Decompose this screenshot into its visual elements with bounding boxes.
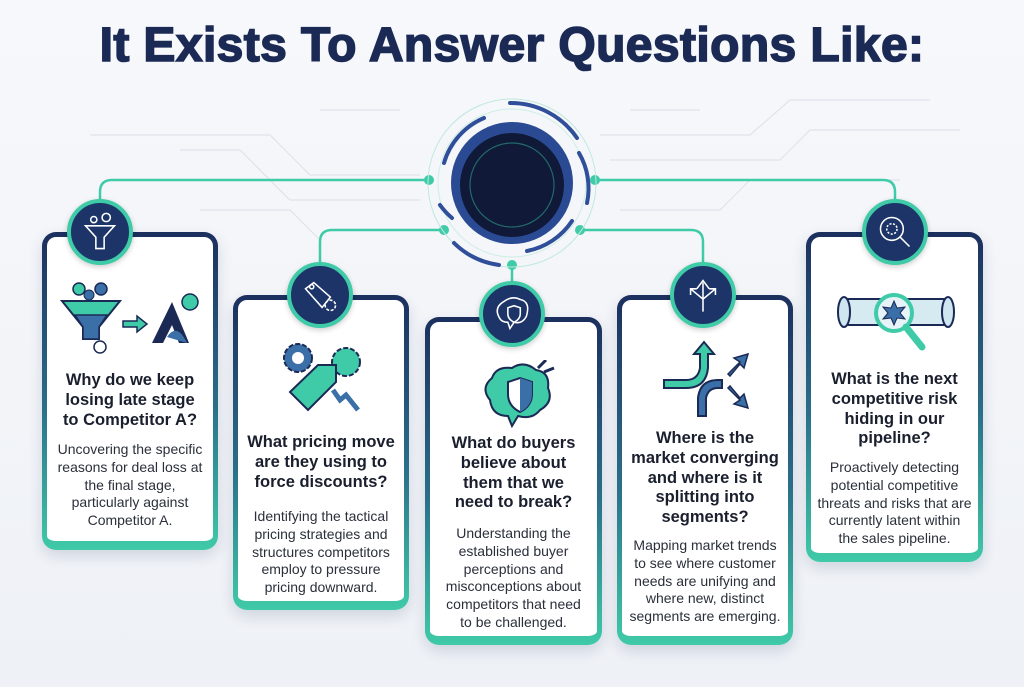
body 5	[817, 459, 972, 546]
question 5	[831, 370, 958, 447]
question 1: to Competitor A?	[63, 411, 197, 429]
icon circle 4	[670, 262, 736, 328]
body 3: Understanding the	[456, 525, 571, 541]
card 2	[233, 295, 409, 610]
body 3: perceptions and	[464, 561, 563, 577]
question 4	[631, 429, 779, 526]
card 4	[617, 295, 793, 645]
question 2: What pricing move	[247, 433, 395, 451]
question 2	[247, 433, 395, 491]
body 1: particularly against	[72, 494, 188, 510]
body 2: pricing strategies and	[254, 526, 388, 542]
question 1: Why do we keep	[66, 371, 194, 389]
question 4: Where is the	[656, 429, 754, 447]
question 4: splitting into	[656, 488, 754, 506]
icon circle 5	[862, 199, 928, 265]
question 5: competitive risk	[832, 390, 957, 408]
question 4: segments?	[661, 508, 749, 526]
body 5: currently latent within	[829, 512, 960, 528]
body 4	[630, 537, 780, 624]
body 4: where new, distinct	[646, 590, 764, 606]
question 4: market converging	[631, 449, 779, 467]
question 5: hiding in our	[845, 410, 944, 428]
body 3: to be challenged.	[460, 614, 567, 630]
question 5: pipeline?	[858, 429, 931, 447]
big icon: price tag	[283, 343, 361, 412]
body 3: competitors that need	[446, 596, 581, 612]
card 3	[425, 317, 602, 645]
body 5: Proactively detecting	[830, 459, 959, 475]
body 2: employ to pressure	[261, 561, 381, 577]
question 2: are they using to	[255, 453, 387, 471]
body 4: needs are unifying and	[634, 573, 776, 589]
body 4: to see where customer	[634, 555, 776, 571]
title: It Exists To Answer Questions Like:	[100, 19, 924, 72]
body 2: structures competitors	[252, 544, 390, 560]
body 2	[252, 508, 390, 595]
body 4: segments are emerging.	[630, 608, 780, 624]
body 1	[58, 441, 202, 528]
body 5: potential competitive	[831, 477, 958, 493]
question 2: force discounts?	[255, 473, 387, 491]
big icon: funnel to competitor A	[60, 282, 199, 354]
body 1: Uncovering the specific	[58, 441, 202, 457]
question 4: and where is it	[648, 469, 762, 487]
body 5: threats and risks that are	[817, 495, 972, 511]
question 1	[63, 371, 197, 429]
question 1: losing late stage	[65, 391, 195, 409]
question 3: them that we	[463, 474, 564, 492]
card 1	[42, 232, 218, 550]
icon circle 2	[287, 262, 353, 328]
body 1: reasons for deal loss at	[58, 459, 202, 475]
icon circle 3	[479, 281, 545, 347]
question 5: What is the next	[831, 370, 958, 388]
question 3: need to break?	[455, 493, 572, 511]
body 5: the sales pipeline.	[838, 530, 951, 546]
body 3	[446, 525, 582, 630]
card 5	[806, 232, 983, 562]
question 3: What do buyers	[452, 434, 575, 452]
central orb	[428, 98, 596, 268]
big icon: diverging arrows	[663, 340, 750, 417]
question 3: believe about	[461, 454, 566, 472]
body 1: Competitor A.	[88, 512, 172, 528]
big icon: brain shield	[484, 360, 554, 428]
body 3: misconceptions about	[446, 578, 581, 594]
body 3: established buyer	[459, 543, 568, 559]
body 2: Identifying the tactical	[254, 508, 388, 524]
big icon: pipeline magnifier	[837, 293, 955, 350]
body 2: pricing downward.	[265, 579, 377, 595]
icon circle 1	[67, 199, 133, 265]
body 4: Mapping market trends	[633, 537, 777, 553]
question 3	[452, 434, 575, 511]
connector lines	[100, 180, 895, 282]
body 1: the final stage,	[84, 477, 176, 493]
